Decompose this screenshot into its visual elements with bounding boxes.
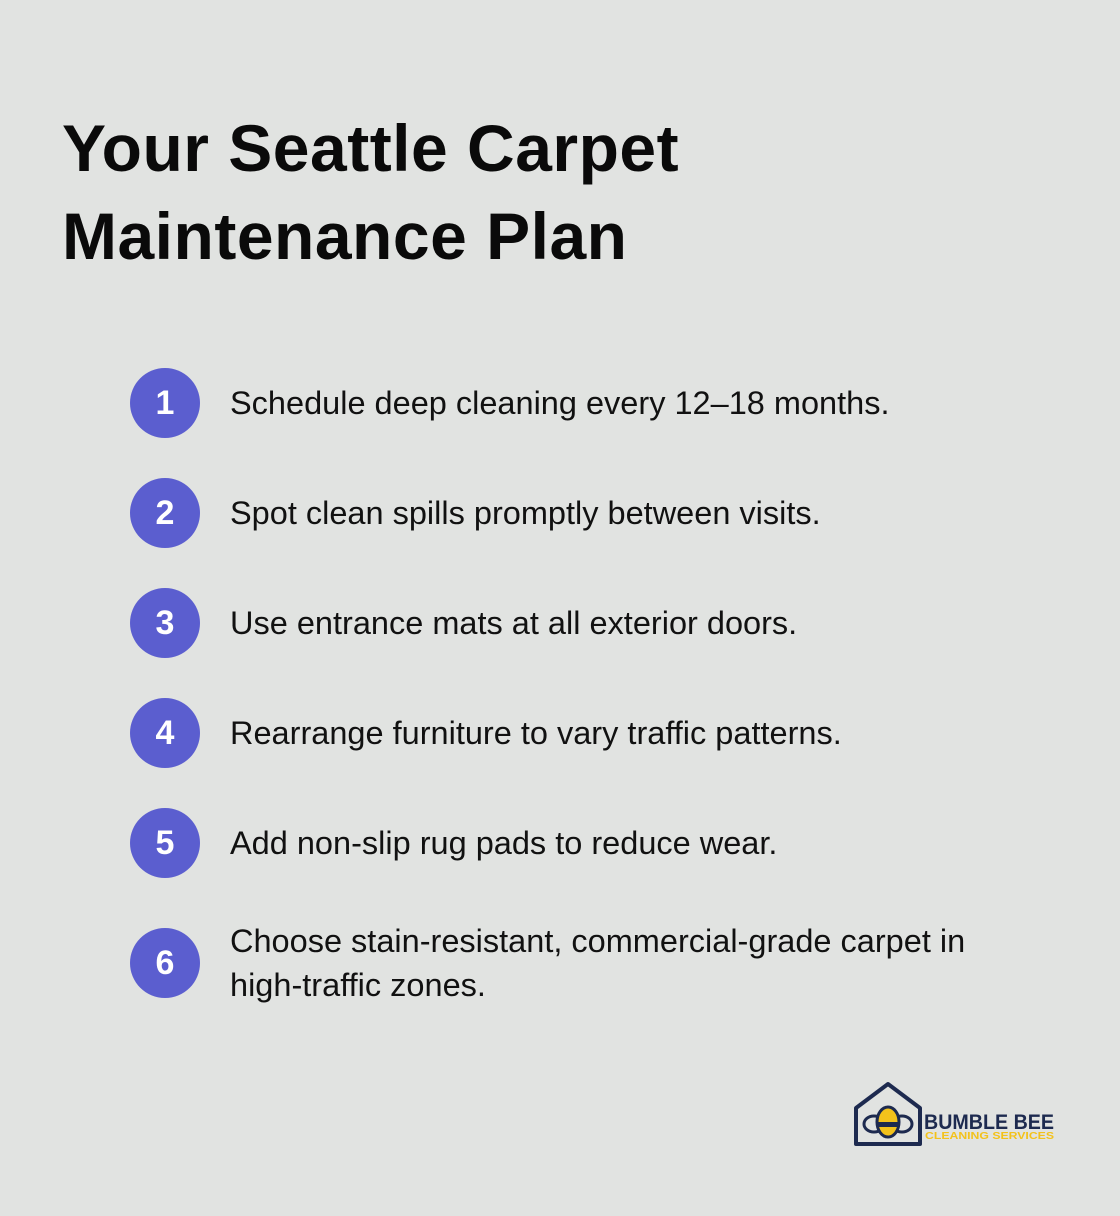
title xyxy=(62,111,679,273)
title: Maintenance Plan xyxy=(62,199,628,273)
logo xyxy=(854,1082,1054,1146)
item 6 xyxy=(130,923,965,1003)
item 3: Use entrance mats at all exterior doors. xyxy=(230,605,797,641)
item 4: 4 xyxy=(156,714,174,752)
item 5: Add non-slip rug pads to reduce wear. xyxy=(230,825,777,861)
item 6: high-traffic zones. xyxy=(230,967,486,1003)
item 6: Choose stain-resistant, commercial-grade carpet in xyxy=(230,923,965,959)
logo: CLEANING SERVICES xyxy=(925,1130,1054,1142)
item 2 xyxy=(130,478,821,548)
item 3: 3 xyxy=(156,604,174,642)
item 4 xyxy=(130,698,842,768)
item 1: Schedule deep cleaning every 12–18 months. xyxy=(230,385,890,421)
item 1: 1 xyxy=(156,384,174,422)
title: Your Seattle Carpet xyxy=(62,111,679,185)
item 2: Spot clean spills promptly between visits. xyxy=(230,495,821,531)
logo: BUMBLE BEE xyxy=(924,1111,1054,1134)
item 1 xyxy=(130,368,890,438)
item 4: Rearrange furniture to vary traffic patterns. xyxy=(230,715,842,751)
item 3 xyxy=(130,588,797,658)
item 6: 6 xyxy=(156,944,174,982)
item 2: 2 xyxy=(156,494,174,532)
item 5: 5 xyxy=(156,824,174,862)
item 5 xyxy=(130,808,777,878)
